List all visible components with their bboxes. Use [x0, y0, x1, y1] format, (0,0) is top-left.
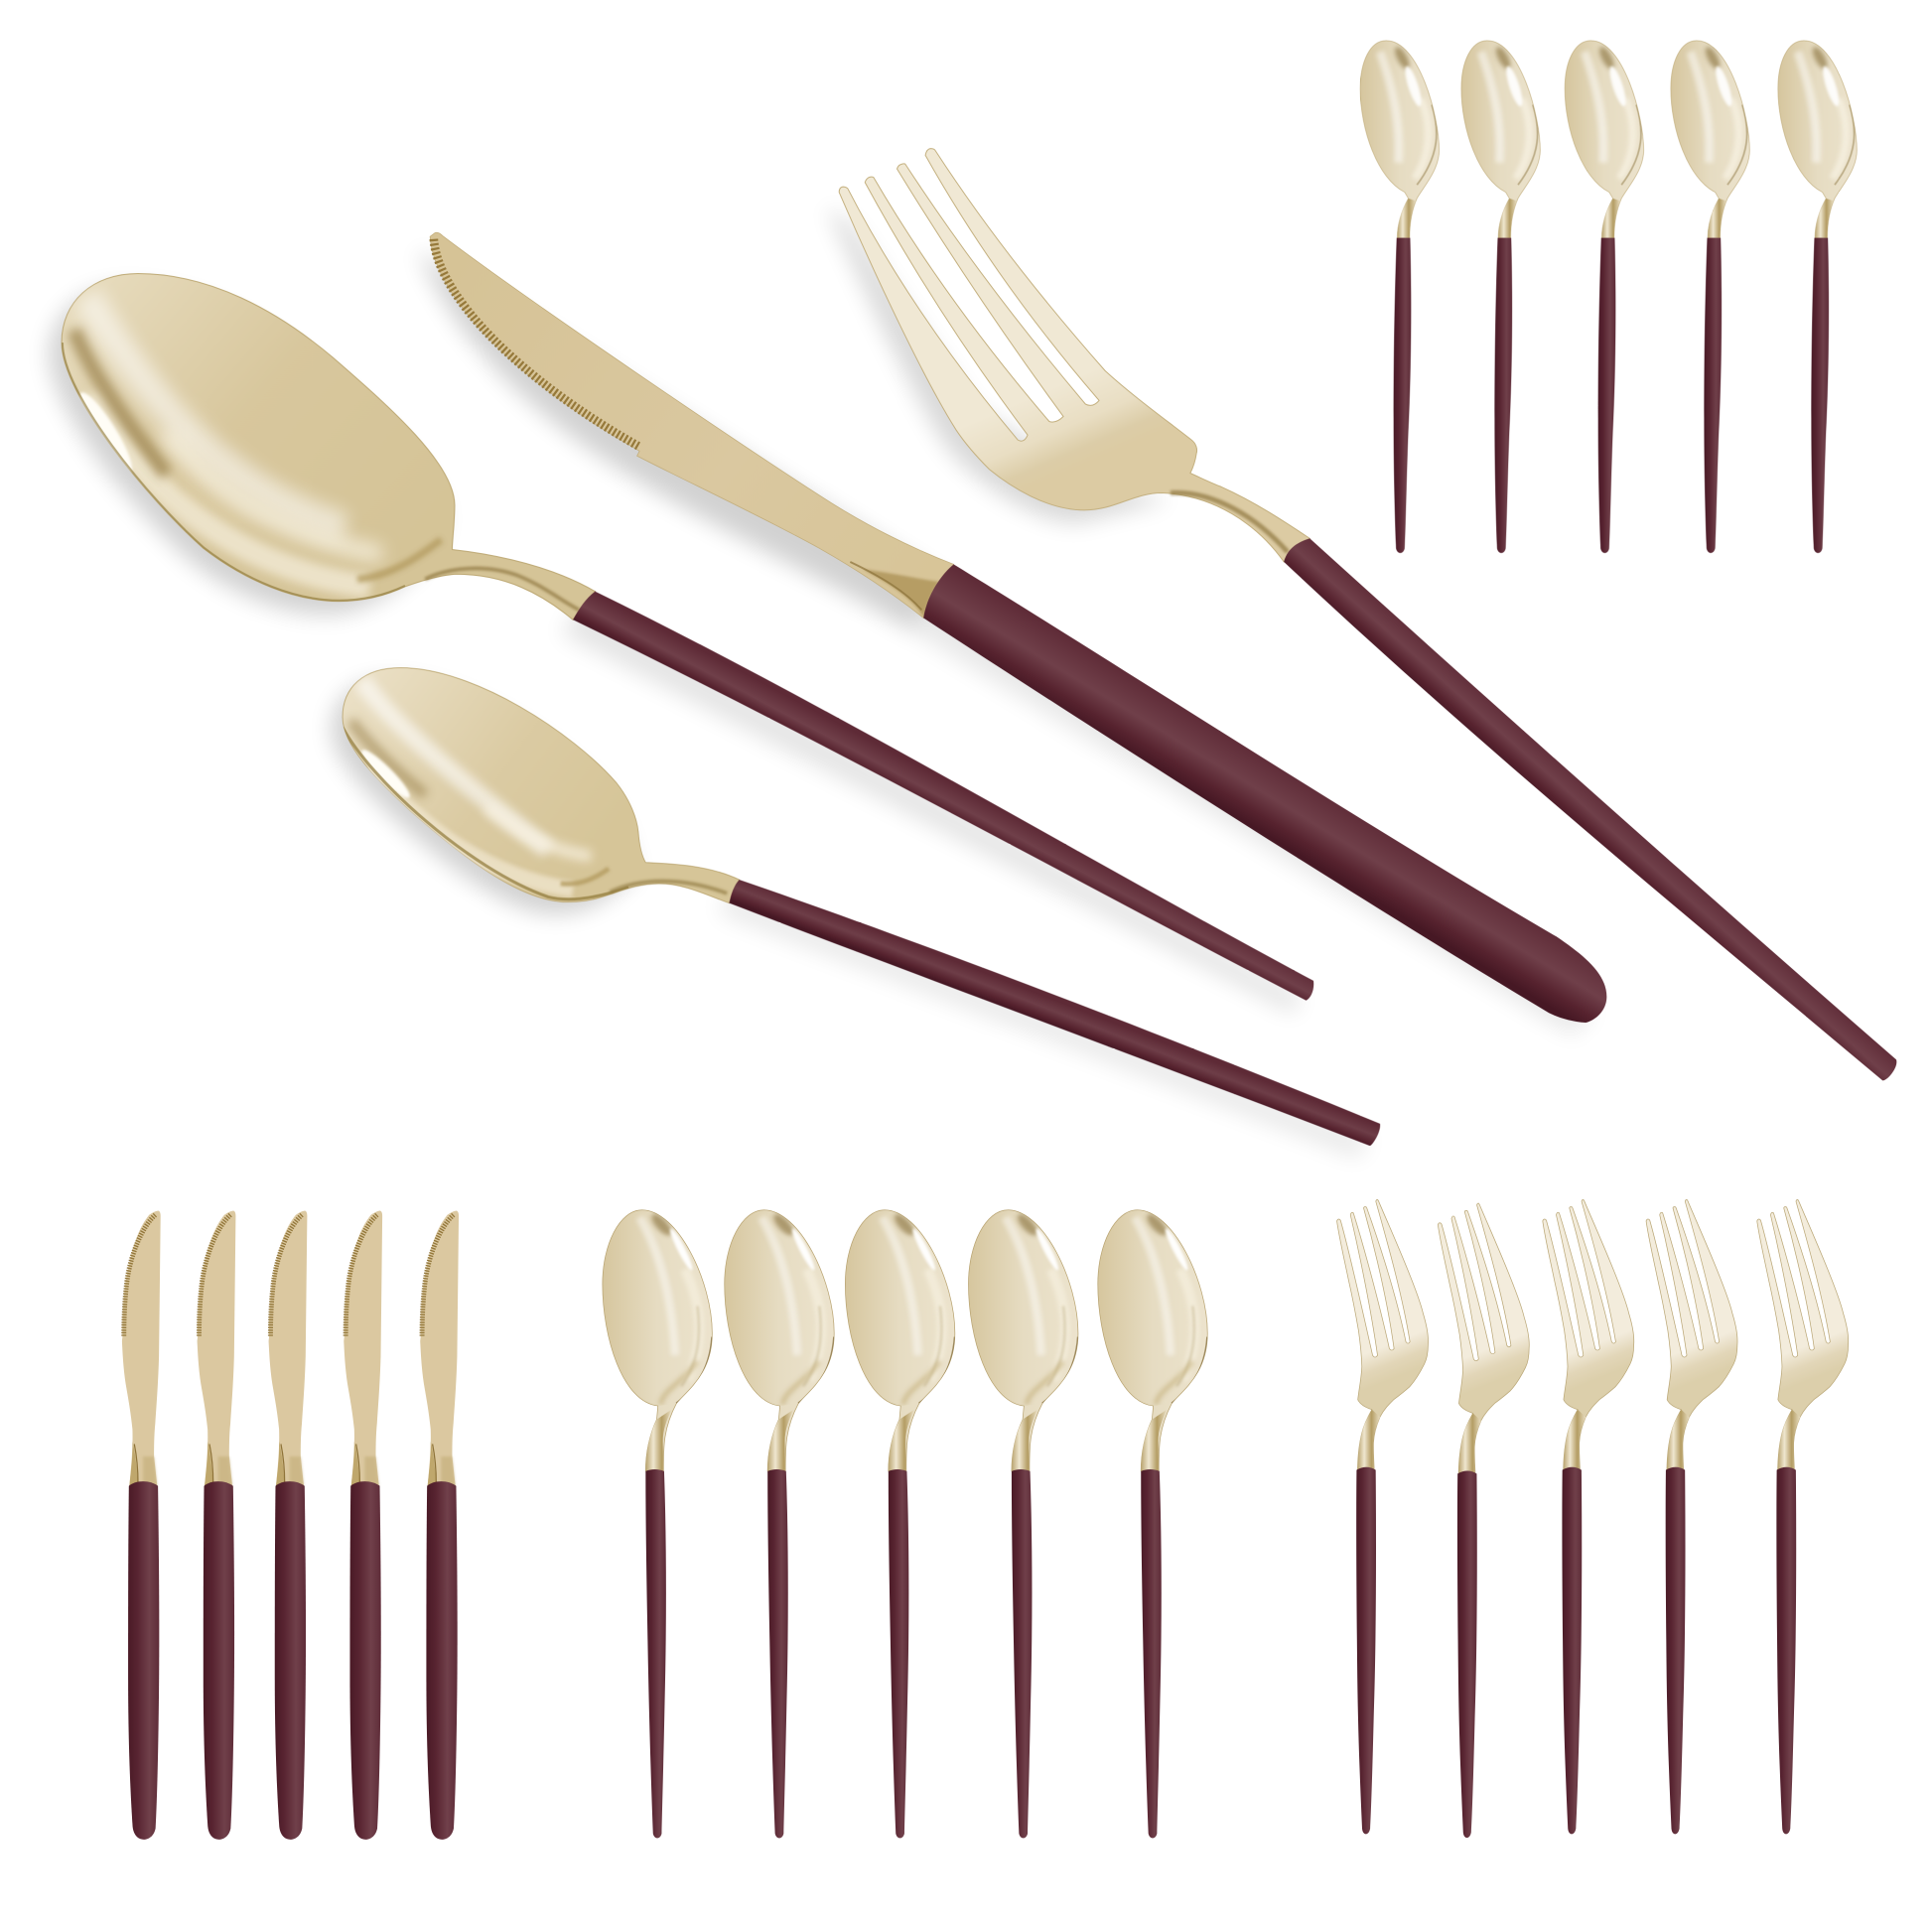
spoon 2 [725, 1210, 834, 1838]
knife 5 [420, 1210, 459, 1840]
fork 2 [1438, 1203, 1529, 1838]
bolster [863, 569, 939, 618]
large spoon [50, 274, 1313, 1014]
medium spoon [332, 668, 1380, 1159]
small spoon 4 [1671, 41, 1749, 553]
fork 5 [1757, 1199, 1849, 1834]
small spoon 3 [1565, 41, 1644, 553]
head and neck [839, 149, 1310, 562]
handle [1284, 538, 1896, 1080]
small forks, bottom right row [1337, 1199, 1849, 1838]
fork 1 [1337, 1199, 1429, 1834]
small spoon 1 [1360, 41, 1440, 553]
shadow [332, 680, 1369, 1159]
fork 4 [1646, 1199, 1737, 1834]
small spoon 5 [1778, 41, 1857, 553]
handle [573, 592, 1313, 1001]
knife 1 [122, 1210, 161, 1840]
large fork [827, 149, 1896, 1080]
spoon 3 [845, 1210, 955, 1838]
spoon 1 [603, 1210, 712, 1838]
shadow [50, 287, 1302, 1014]
knife 4 [344, 1210, 382, 1840]
neck shading [1171, 492, 1288, 552]
blade [430, 232, 954, 618]
medium spoons, bottom centre row [603, 1210, 1207, 1838]
neck shading [610, 882, 727, 894]
knife 2 [198, 1210, 235, 1840]
neck shading [425, 568, 579, 610]
handle [923, 564, 1606, 1023]
small knives, bottom left row [122, 1210, 459, 1840]
spoon 5 [1098, 1210, 1207, 1838]
shadow [418, 250, 1594, 1036]
large knife [418, 232, 1606, 1036]
serrated edge [434, 239, 638, 446]
bowl and neck [343, 668, 740, 903]
fork 3 [1543, 1199, 1634, 1834]
bowl and neck [62, 274, 595, 620]
spoon 4 [968, 1210, 1078, 1838]
handle [730, 880, 1380, 1146]
small spoon 2 [1461, 41, 1540, 553]
knife 3 [269, 1210, 307, 1840]
shadow [827, 206, 1171, 523]
small spoons, top right row [1360, 41, 1857, 553]
